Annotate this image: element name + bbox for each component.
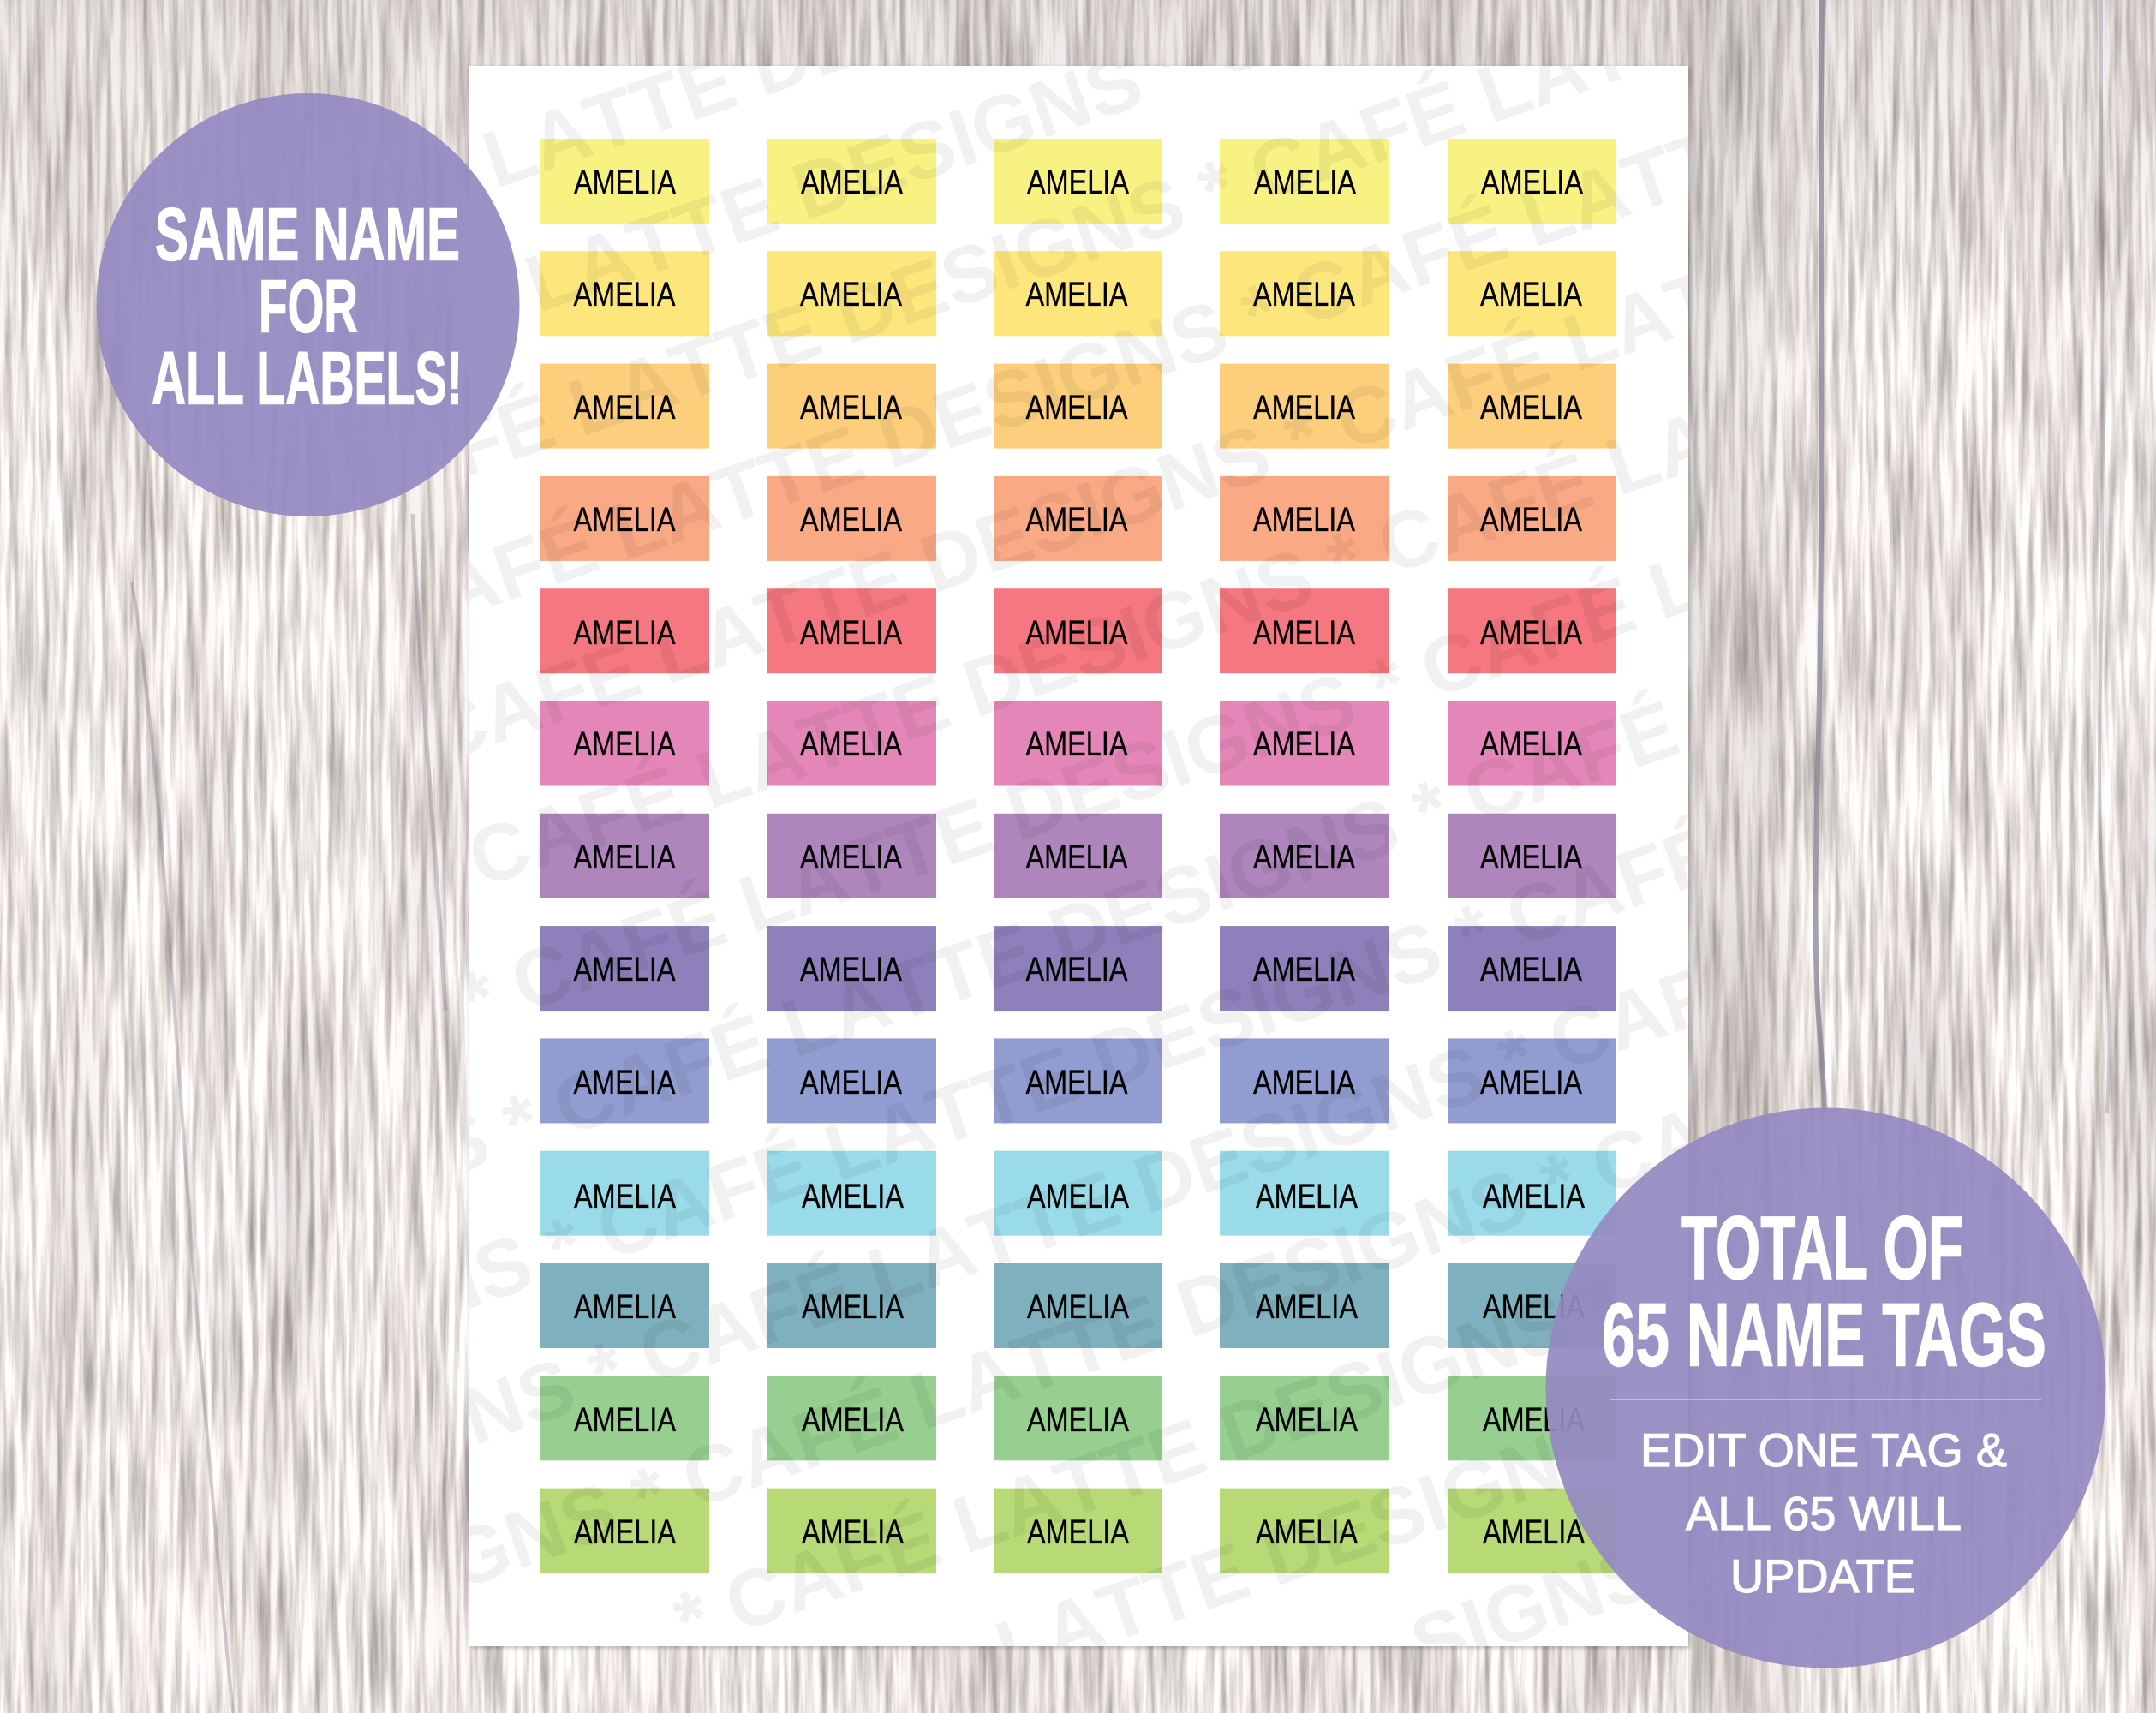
tag: AMELIA: [1027, 1178, 1130, 1215]
tag: AMELIA: [801, 164, 904, 201]
tag: [1220, 701, 1389, 786]
tag: [1448, 364, 1616, 449]
watermark: LATTE DESIGNS *: [985, 1382, 1675, 1695]
tag: [540, 1489, 709, 1573]
badge heading: [152, 194, 463, 420]
tag: [1448, 1376, 1616, 1460]
tag: [1220, 1038, 1389, 1123]
badge heading: FOR: [259, 266, 358, 348]
row 7: mauve: [540, 814, 1616, 898]
tag: [1220, 1151, 1389, 1236]
tag: AMELIA: [800, 276, 903, 313]
tag: [994, 476, 1162, 561]
tag: [994, 251, 1162, 336]
tag: AMELIA: [1481, 164, 1584, 201]
tag: AMELIA: [1480, 614, 1583, 652]
tag: AMELIA: [574, 725, 676, 763]
tag: [767, 814, 936, 898]
tag: [540, 588, 709, 673]
tag: AMELIA: [1480, 951, 1583, 988]
watermark: DESIGNS * CAFÉ LATTE DESIGNS * CAFÉ LATTE: [128, 591, 1955, 1295]
tag: AMELIA: [1256, 1401, 1359, 1439]
tag: [540, 476, 709, 561]
badge heading: SAME NAME: [155, 194, 460, 276]
tag: AMELIA: [1027, 164, 1130, 201]
tag: [767, 1151, 936, 1236]
watermark: SIGNS *: [1400, 1507, 1717, 1691]
watermark: * CAFÉ LATTE DESIGNS * CAFÉ: [663, 1179, 1860, 1667]
tag: [540, 139, 709, 224]
tag: AMELIA: [1256, 1288, 1359, 1326]
tag: [1220, 588, 1389, 673]
tag: AMELIA: [802, 1513, 905, 1551]
tag: AMELIA: [1253, 725, 1356, 763]
tag: [767, 364, 936, 449]
tag: AMELIA: [800, 839, 903, 876]
badge subtext: EDIT ONE TAG &: [1640, 1424, 2007, 1477]
row 8: violet: [540, 926, 1616, 1011]
watermark: CAFÉ LATTE DESIGNS * CAFÉ LATTE: [372, 95, 1784, 656]
tag: AMELIA: [1027, 1288, 1130, 1326]
row 10: sky: [540, 1151, 1616, 1236]
tag: AMELIA: [1256, 1513, 1359, 1551]
tag: AMELIA: [1480, 389, 1583, 427]
tag: [767, 1263, 936, 1348]
circle badge: [96, 93, 519, 516]
tag: [1448, 476, 1616, 561]
tag: AMELIA: [1483, 1513, 1586, 1551]
watermark: DESIGNS * CAFÉ LATTE DESIGNS * CAFÉ: [170, 807, 1731, 1419]
tag: AMELIA: [1253, 389, 1356, 427]
tag: [767, 1489, 936, 1573]
tag: AMELIA: [574, 164, 677, 201]
tag: [767, 1038, 936, 1123]
tag: [1448, 1263, 1616, 1348]
badge subtext: [1640, 1424, 2007, 1603]
tag: [540, 251, 709, 336]
tag: AMELIA: [574, 951, 676, 988]
tag: [540, 1376, 709, 1460]
tag: AMELIA: [800, 1064, 903, 1101]
tag: AMELIA: [800, 614, 903, 652]
tag: [994, 588, 1162, 673]
row 2: light amber: [540, 251, 1616, 336]
tag: AMELIA: [1483, 1288, 1586, 1326]
tag: AMELIA: [574, 1064, 676, 1101]
tag: AMELIA: [1253, 501, 1356, 539]
tag: [994, 814, 1162, 898]
tag: [540, 364, 709, 449]
tag: AMELIA: [574, 839, 676, 876]
tag: AMELIA: [1026, 839, 1128, 876]
tag: AMELIA: [1027, 1401, 1130, 1439]
callout: total of 65 name tags: [1545, 1108, 2105, 1668]
tag: AMELIA: [1253, 839, 1356, 876]
watermark: DESIGNS * CAFÉ LATTE DESIGNS * CAFÉ: [213, 931, 1774, 1543]
tag: [1220, 1376, 1389, 1460]
badge heading: ALL LABELS!: [152, 337, 463, 420]
tag: [994, 1263, 1162, 1348]
tag: [1220, 926, 1389, 1011]
row 6: pink: [540, 701, 1616, 786]
tag: [1220, 1489, 1389, 1573]
tag: [540, 814, 709, 898]
tag: [994, 1151, 1162, 1236]
tag: AMELIA: [1483, 1401, 1586, 1439]
tag: [540, 1151, 709, 1236]
tag: [767, 1376, 936, 1460]
tag: [767, 926, 936, 1011]
row 4: peach: [540, 476, 1616, 561]
tag: [1448, 926, 1616, 1011]
watermark: * CAFÉ LATTE DESIGNS * CAFÉ LATTE: [406, 343, 1870, 922]
tag: AMELIA: [802, 1288, 905, 1326]
row 12: green: [540, 1376, 1616, 1460]
tag: AMELIA: [1026, 725, 1128, 763]
tag: [540, 1263, 709, 1348]
tag: [540, 1038, 709, 1123]
tag: [1448, 1038, 1616, 1123]
tag: AMELIA: [1480, 501, 1583, 539]
tag: AMELIA: [1026, 389, 1128, 427]
tag: [994, 139, 1162, 224]
tag: [540, 701, 709, 786]
badge subtext: UPDATE: [1730, 1549, 1915, 1603]
tag: AMELIA: [1254, 164, 1357, 201]
badge heading: TOTAL OF: [1681, 1198, 1963, 1298]
tag: AMELIA: [1480, 725, 1583, 763]
tag: [767, 701, 936, 786]
tag: AMELIA: [800, 501, 903, 539]
tag: AMELIA: [1253, 951, 1356, 988]
tag: AMELIA: [1253, 614, 1356, 652]
tag: AMELIA: [1026, 614, 1128, 652]
row 5: coral: [540, 588, 1616, 673]
tag: [767, 139, 936, 224]
tag: [1220, 814, 1389, 898]
tag: [1448, 1151, 1616, 1236]
tag: AMELIA: [574, 501, 676, 539]
tag: AMELIA: [574, 1288, 677, 1326]
tag: [994, 926, 1162, 1011]
tag: [994, 1038, 1162, 1123]
tag: AMELIA: [1253, 276, 1356, 313]
tag: AMELIA: [802, 1178, 905, 1215]
tag: AMELIA: [1026, 1064, 1128, 1101]
tag: [1220, 139, 1389, 224]
tag: AMELIA: [1480, 1064, 1583, 1101]
callout: same name for all labels: [96, 93, 519, 516]
tag: [1220, 1263, 1389, 1348]
tag: AMELIA: [574, 1513, 677, 1551]
tag: AMELIA: [800, 725, 903, 763]
tag: AMELIA: [574, 389, 676, 427]
tag: [1448, 701, 1616, 786]
tag: [1448, 1489, 1616, 1573]
watermark: CAFÉ LATTE DESIGNS * CAFÉ LATTE: [415, 219, 1827, 780]
tag: [1220, 476, 1389, 561]
tag: AMELIA: [1026, 951, 1128, 988]
tag: AMELIA: [1253, 1064, 1356, 1101]
paper sheet: [469, 66, 1688, 1646]
tag: AMELIA: [1027, 1513, 1130, 1551]
row 13: lime: [540, 1489, 1616, 1573]
row 3: amber: [540, 364, 1616, 449]
circle badge: [1545, 1108, 2105, 1668]
row 9: periwinkle: [540, 1038, 1616, 1123]
tag: AMELIA: [574, 1178, 677, 1215]
tag: [1220, 364, 1389, 449]
tag: AMELIA: [800, 951, 903, 988]
tag: [994, 1376, 1162, 1460]
watermark: * CAFÉ LATTE DESIGNS * CAFÉ LATTE: [449, 467, 1913, 1046]
tag: [994, 701, 1162, 786]
tag: AMELIA: [574, 276, 676, 313]
tag: AMELIA: [800, 389, 903, 427]
tag: [767, 588, 936, 673]
tag: [767, 476, 936, 561]
tag: AMELIA: [1026, 276, 1128, 313]
row 11: teal: [540, 1263, 1616, 1348]
tag: AMELIA: [574, 1401, 677, 1439]
tag: AMELIA: [1026, 501, 1128, 539]
tag: AMELIA: [1480, 839, 1583, 876]
watermark: [469, 66, 1688, 1646]
tag: [540, 926, 709, 1011]
badge heading: [1602, 1198, 2046, 1386]
watermark: DESIGNS * CAFÉ LATTE DESIGNS * CAFÉ: [256, 1055, 1817, 1668]
tag: AMELIA: [1480, 276, 1583, 313]
name tag grid: [540, 139, 1616, 1573]
tag: AMELIA: [802, 1401, 905, 1439]
tag: [994, 1489, 1162, 1573]
row 1: yellow: [540, 139, 1616, 224]
tag: [1448, 588, 1616, 673]
tag: [1220, 251, 1389, 336]
tag: [994, 364, 1162, 449]
tag: [767, 251, 936, 336]
tag: AMELIA: [574, 614, 676, 652]
badge subtext: ALL 65 WILL: [1686, 1487, 1962, 1540]
tag: AMELIA: [1256, 1178, 1359, 1215]
tag: [1448, 139, 1616, 224]
tag: AMELIA: [1483, 1178, 1586, 1215]
tag: [1448, 251, 1616, 336]
tag: [1448, 814, 1616, 898]
